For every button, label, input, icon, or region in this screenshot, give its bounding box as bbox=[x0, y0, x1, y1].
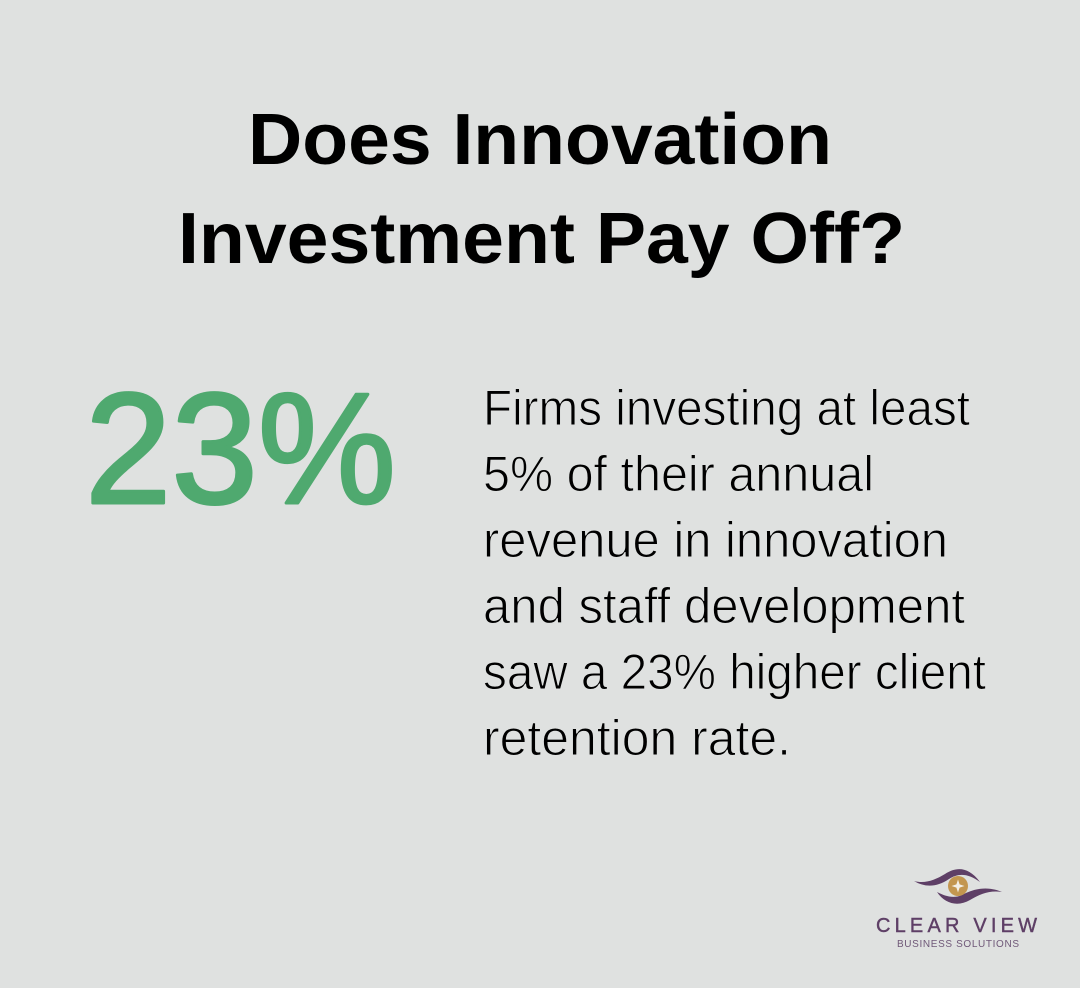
logo tagline: BUSINESS SOLUTIONS bbox=[897, 939, 1019, 950]
big stat: 23%: 23% bbox=[85, 361, 396, 537]
description text: retention rate. bbox=[483, 710, 791, 766]
logo wordmark: CLEAR VIEW bbox=[876, 915, 1037, 937]
description text: Firms investing at least bbox=[483, 380, 970, 436]
icon: eye swooshes bbox=[914, 869, 1002, 904]
title bbox=[178, 100, 905, 279]
title: Does Innovation bbox=[248, 100, 832, 180]
logo: Clear View Business Solutions bbox=[876, 869, 1037, 950]
description text: and staff development bbox=[483, 578, 965, 634]
description text: 5% of their annual bbox=[483, 446, 874, 502]
description text: revenue in innovation bbox=[483, 512, 948, 568]
description text bbox=[483, 380, 986, 766]
icon: gold circle with star bbox=[948, 876, 968, 896]
title: Investment Pay Off? bbox=[178, 199, 905, 279]
description text: saw a 23% higher client bbox=[483, 644, 986, 700]
